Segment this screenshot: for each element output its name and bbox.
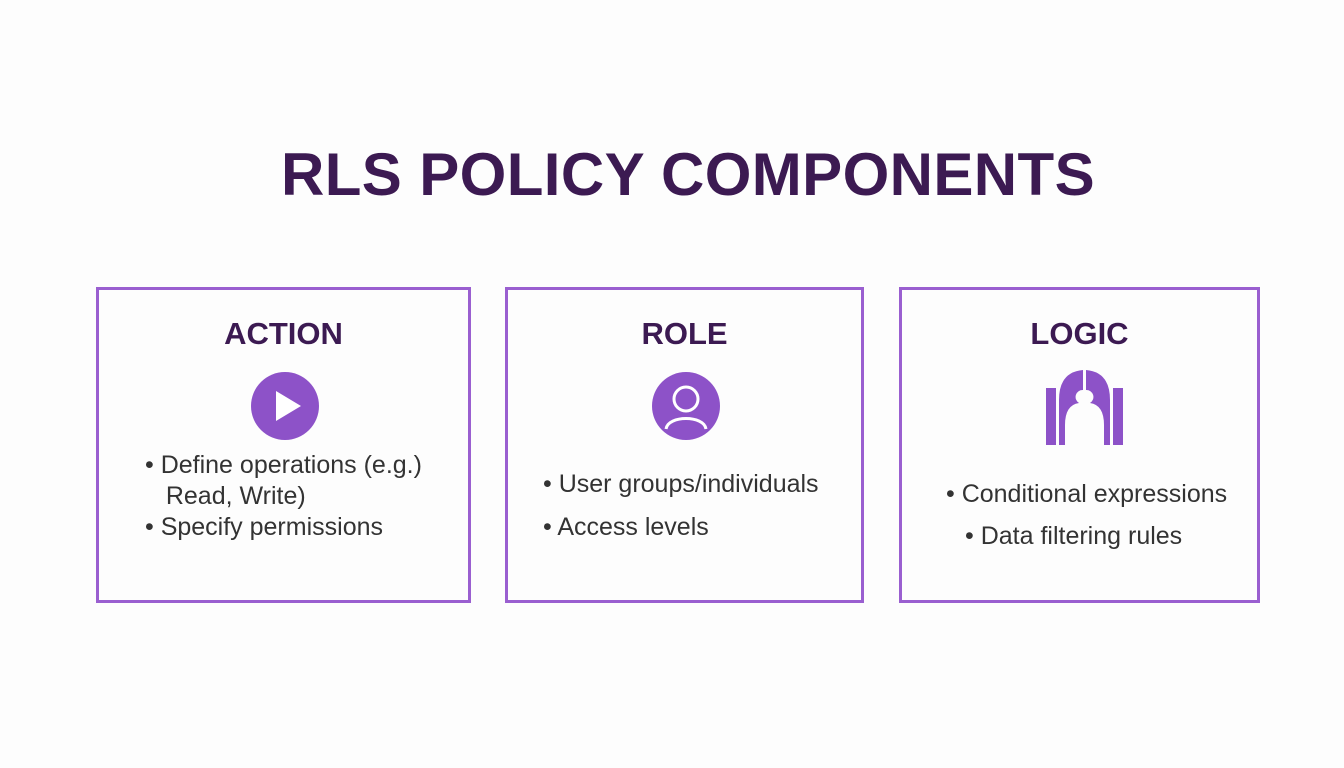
text: action bullets: • Specify permissions	[145, 513, 383, 541]
text: role bullets: • User groups/individuals	[543, 470, 819, 498]
heading: role: ROLE	[641, 316, 728, 351]
heading: action: ACTION	[224, 316, 343, 351]
icon: user	[652, 372, 720, 440]
panel: role: • Access levels	[543, 513, 709, 541]
text: action bullets	[145, 451, 422, 541]
text: action bullets: • Define operations (e.g.)	[145, 451, 422, 479]
panel: role	[505, 287, 864, 603]
panel: action	[96, 287, 471, 603]
text: action bullets: Read, Write)	[166, 482, 306, 510]
icon: play button	[251, 372, 319, 440]
title: RLS POLICY COMPONENTS	[281, 141, 1095, 208]
panel: logic: • Data filtering rules	[965, 522, 1182, 550]
panel: logic	[899, 287, 1260, 603]
heading: logic: LOGIC	[1030, 316, 1129, 351]
icon: logic arch	[1046, 370, 1123, 445]
text: logic bullets: • Conditional expressions	[946, 480, 1227, 508]
